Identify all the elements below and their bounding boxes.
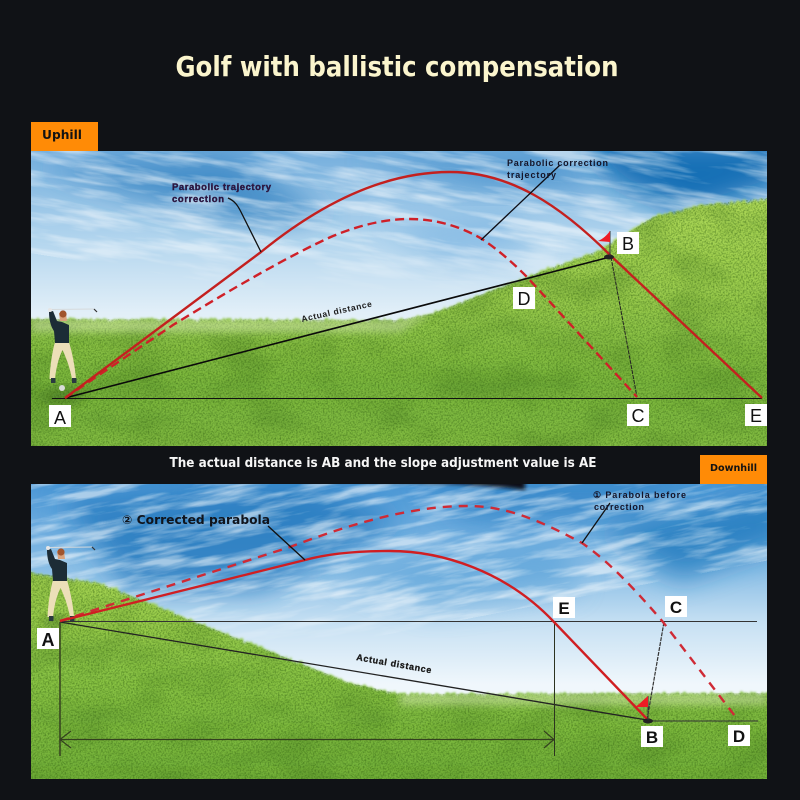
label E: E: [558, 599, 570, 618]
label A: [49, 405, 71, 428]
label E: [553, 597, 575, 618]
tag: downhill: Downhill: [710, 463, 757, 474]
leader: parabola before correction: [582, 503, 610, 543]
tag: uphill: Uphill: [42, 128, 82, 142]
label C: [627, 404, 649, 426]
label E: [745, 404, 767, 426]
vertical marker at E: [554, 622, 556, 756]
uphill background: sky and grass hill: [31, 151, 767, 446]
text: parabolic correction trajectory: trajectory: [507, 170, 556, 180]
dashed trajectory: before correction: [65, 219, 637, 398]
label B: B: [622, 234, 634, 254]
double-headed arrow: horizontal distance: [60, 731, 554, 748]
text: corrected parabola: ② Corrected parabola: [122, 513, 270, 527]
text: parabola before correction: ① Parabola before: [593, 490, 686, 500]
label A: A: [42, 630, 54, 650]
text: parabolic correction trajectory: Parabolic correction: [507, 158, 608, 168]
label D: D: [733, 727, 745, 746]
label A: A: [54, 408, 66, 428]
label C: [665, 596, 687, 617]
actual distance line AB: [60, 622, 647, 720]
label E: E: [750, 406, 762, 426]
text: actual distance: Actual distance: [356, 652, 432, 675]
actual distance line AB: [65, 257, 610, 398]
label D: [513, 287, 535, 309]
panel: downhill diagram: [31, 484, 767, 779]
label C: C: [632, 406, 644, 426]
dashed trajectory: before correction: [60, 506, 738, 720]
text: parabolic trajectory correction: Parabolic trajectory: [172, 182, 272, 193]
dashed line BC: [611, 257, 637, 397]
horizontal line B to D: [647, 720, 758, 722]
dashed line BC: [647, 622, 664, 720]
flag: hole B: [635, 696, 653, 724]
label D: [728, 725, 750, 746]
downhill background: sky and grass slope: [31, 484, 767, 779]
baseline A to E: [52, 398, 762, 400]
vertical marker at A: [59, 622, 61, 756]
text: parabolic trajectory correction: correction: [172, 194, 224, 205]
flag: hole B: [598, 231, 614, 260]
golfer: downhill: [46, 546, 95, 621]
label D: D: [518, 289, 530, 309]
caption: The actual distance is AB and the slope adjustment value is AE: [170, 456, 596, 471]
label B: [641, 726, 663, 747]
solid trajectory: corrected: [65, 172, 762, 398]
text: parabola before correction: correction: [594, 502, 644, 512]
label C: C: [670, 598, 682, 617]
tag: downhill: [700, 455, 767, 484]
title: Golf with ballistic compensation: [176, 50, 618, 83]
leader: parabolic correction trajectory: [481, 165, 560, 240]
golfer: uphill: [48, 308, 97, 391]
leader: parabolic trajectory correction: [228, 198, 261, 252]
panel: uphill diagram: [31, 151, 767, 446]
horizontal line A to C: [60, 620, 757, 622]
label B: B: [646, 728, 658, 747]
solid trajectory: corrected: [60, 551, 647, 719]
label B: [617, 232, 639, 254]
leader: corrected parabola: [268, 526, 305, 560]
label A: [37, 628, 59, 650]
tag: uphill: [31, 122, 98, 151]
text: actual distance: Actual distance: [300, 299, 373, 324]
